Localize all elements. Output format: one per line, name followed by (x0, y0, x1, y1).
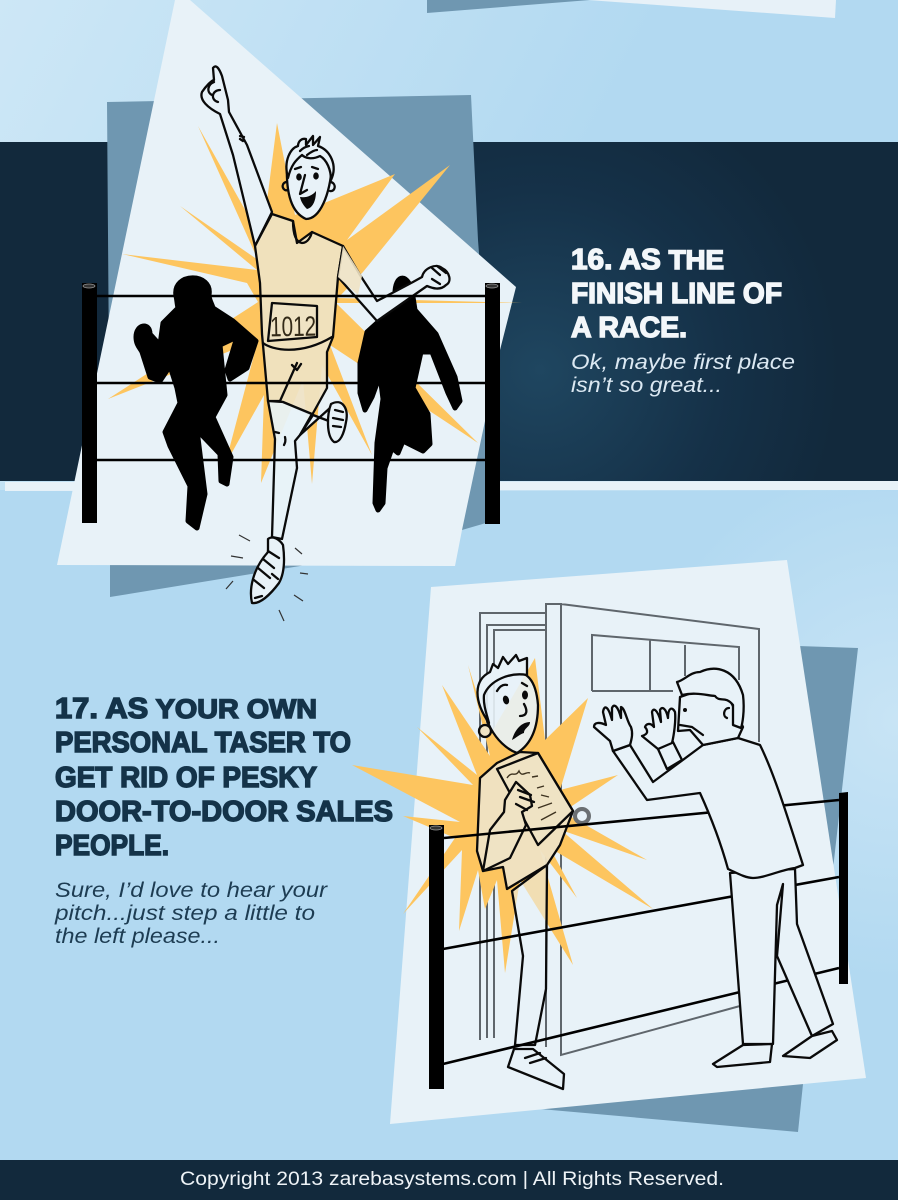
silhouette runner left (136, 278, 256, 528)
white strip under band (5, 481, 898, 491)
heading 17 line 2: PERSONAL TASER TO (55, 727, 351, 759)
panel: illustration 17 taser (352, 560, 866, 1132)
heading 16: 16. AS THE (571, 244, 724, 276)
hair (286, 136, 334, 180)
right arm (338, 246, 449, 321)
shirt and shorts (255, 214, 343, 415)
jacket (613, 738, 803, 878)
hair (477, 655, 527, 723)
lower background (0, 490, 898, 1160)
heading 17 line 1: 17. AS YOUR OWN (55, 693, 317, 725)
front leg (268, 401, 312, 539)
front shoe (251, 538, 284, 603)
heading 16 line 2: FINISH LINE OF (571, 278, 782, 310)
paper sheet (57, 0, 516, 566)
fence posts (429, 792, 848, 1089)
heading 17 line 4: DOOR-TO-DOOR SALES (55, 796, 393, 828)
bib number (268, 303, 317, 342)
fence posts and wires (82, 283, 500, 524)
yellow starburst (352, 658, 653, 973)
clipboard (497, 753, 573, 845)
heading 16 line 3: A RACE. (571, 312, 687, 344)
torso (477, 752, 573, 889)
footer bar (0, 1160, 898, 1200)
fence wires (443, 800, 839, 1064)
impact lines (226, 535, 308, 621)
hem (263, 337, 332, 350)
paper sheet (390, 560, 866, 1124)
shoes (713, 1031, 837, 1067)
heading 17 (55, 693, 393, 862)
backing shape (107, 95, 490, 597)
heading 17 line 3: GET RID OF PESKY (55, 762, 317, 794)
subtext 17: Sure, I’d love to hear your (55, 879, 328, 902)
bib number: 1012 (270, 311, 316, 342)
subtext 16: isn’t so great... (571, 374, 722, 397)
copyright: Copyright 2013 zarebasystems.com | All Rights Reserved. (180, 1169, 724, 1190)
dark band (0, 142, 898, 481)
ear (479, 725, 491, 737)
backing shape (540, 646, 858, 1132)
head (483, 672, 538, 753)
rear shoe (328, 402, 347, 442)
subtext 17: pitch...just step a little to (54, 902, 315, 925)
panel: illustration 16 finish line (57, 0, 522, 621)
face and hair (677, 669, 744, 745)
legs (512, 865, 547, 1045)
raised arm (201, 66, 272, 246)
shoe (508, 1049, 564, 1089)
face (497, 683, 530, 740)
sleeve (338, 246, 362, 295)
subtext 16: Ok, maybe first place (571, 351, 795, 374)
heading 17 line 5: PEOPLE. (55, 830, 169, 862)
shocked man (477, 655, 573, 1089)
head (283, 136, 335, 219)
subtext 17: the left please... (55, 925, 220, 948)
hands (594, 706, 675, 751)
subtext 16 (571, 351, 795, 397)
knee marks (275, 432, 285, 445)
door frame (480, 604, 759, 1055)
silhouette runner right (360, 278, 460, 510)
subtext 17 (54, 879, 328, 948)
rear lower leg (300, 408, 334, 435)
hand and arm (483, 782, 532, 871)
face (296, 173, 302, 181)
runner figure (201, 66, 449, 621)
fingers (208, 82, 244, 141)
salesman (594, 669, 837, 1067)
legs (730, 869, 833, 1044)
inner arm (658, 742, 682, 769)
previous panel remnant at top (427, 0, 836, 18)
fist fingers (432, 266, 446, 284)
door handle ring (575, 809, 589, 823)
yellow starburst (108, 123, 522, 484)
collar (293, 221, 312, 243)
